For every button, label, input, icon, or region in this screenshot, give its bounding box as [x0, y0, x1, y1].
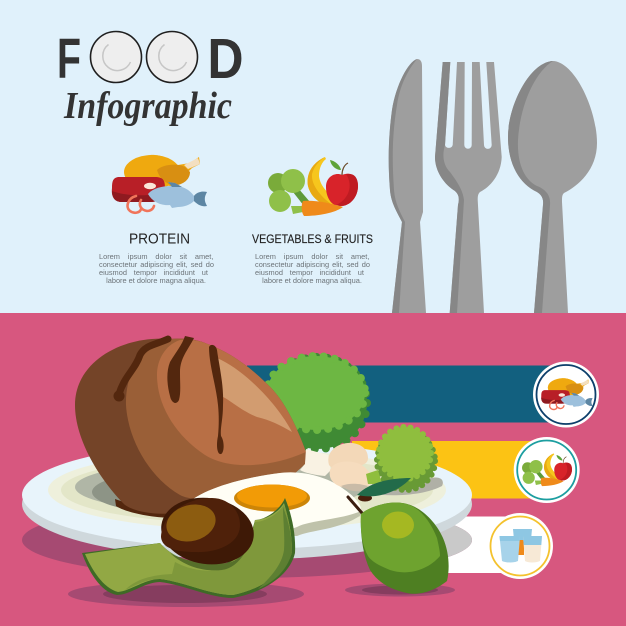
- heading: protein: PROTEIN: [129, 230, 190, 248]
- text block: protein description: consectetur adipiscing elit, sed do: [99, 260, 214, 269]
- icon: vegetables and fruits: [268, 157, 358, 216]
- text block: protein description: Lorem ipsum dolor sit amet,: [99, 252, 213, 261]
- background: pink bottom panel: [0, 313, 626, 626]
- stem: [348, 497, 362, 513]
- sauce drips: [114, 336, 224, 454]
- title: FOOD: D: [208, 27, 244, 91]
- mushrooms: [328, 443, 372, 491]
- bar: blue protein band: [247, 366, 567, 422]
- fried egg: [186, 472, 361, 536]
- title: FOOD: F: [57, 27, 81, 91]
- badge: vegetables and fruits: [514, 437, 580, 503]
- title: FOOD: [57, 27, 244, 91]
- icon: protein foods: [112, 155, 207, 213]
- background: light blue top panel: [0, 0, 626, 313]
- avocado shadow: [68, 581, 304, 607]
- plate shadow: [22, 526, 472, 578]
- badge: drinks: [487, 513, 553, 579]
- text block: vegetables description: [255, 252, 370, 285]
- sauce pool under meat: [115, 499, 185, 518]
- heading: vegetables and fruits: VEGETABLES & FRUITS: [252, 232, 373, 246]
- text block: vegetables description: consectetur adipiscing elit, sed do: [255, 260, 370, 269]
- avocado pit: [157, 492, 258, 570]
- white onion: [300, 449, 331, 476]
- broccoli: [366, 427, 435, 490]
- meat: roast chicken: [75, 336, 306, 514]
- plate: [22, 441, 472, 560]
- avocado: [82, 492, 295, 598]
- text block: protein description: labore et dolore magna aliqua.: [106, 276, 206, 285]
- lime: [361, 503, 449, 594]
- icon: plate as second letter O: [146, 32, 198, 82]
- text block: vegetables description: labore et dolore magna aliqua.: [262, 276, 362, 285]
- text block: protein description: eiusmod tempor incididunt ut: [99, 268, 208, 277]
- lettuce large: [267, 356, 367, 449]
- icon: fork: [435, 62, 502, 313]
- icon: knife: [389, 59, 426, 313]
- badge: protein: [533, 362, 599, 428]
- lime shadow: [345, 584, 455, 596]
- title: Infographic script: Infographic: [63, 85, 232, 127]
- bar: white drinks band: [430, 516, 520, 573]
- text block: protein description: [99, 252, 214, 285]
- icon: spoon: [508, 61, 597, 313]
- egg yolk: [234, 484, 310, 512]
- leaf: [357, 478, 411, 502]
- text block: vegetables description: eiusmod tempor incididunt ut: [255, 268, 364, 277]
- icon: glasses: [500, 529, 542, 562]
- icon: plate as letter O: [90, 32, 142, 82]
- text block: vegetables description: Lorem ipsum dolor sit amet,: [255, 252, 369, 261]
- bar: yellow vegetables band: [352, 441, 547, 498]
